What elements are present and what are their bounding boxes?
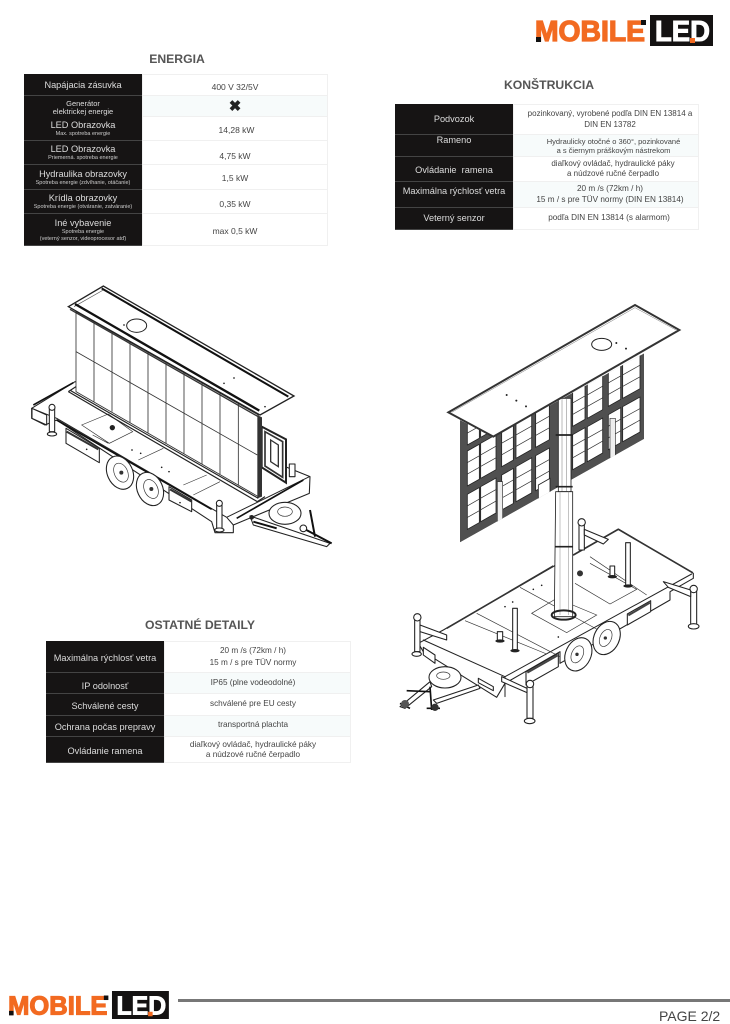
stabiliser legs xyxy=(412,519,699,724)
row: led obrazovka max: Max. spotreba energie xyxy=(56,131,110,137)
logo: top right: LED xyxy=(655,16,710,48)
table: ostatne detaily xyxy=(46,641,351,763)
row: maximalna rychlost vetra: 15 m / s pre TÜV normy xyxy=(210,658,296,667)
rear wing panel xyxy=(262,427,286,483)
led screen module grid xyxy=(460,353,644,542)
heading: energia: ENERGIA xyxy=(149,52,205,66)
row: veterny senzor: podľa DIN EN 13814 (s alarmom) xyxy=(548,213,670,222)
row: rameno: a s čiernym práškovým nástrekom xyxy=(557,146,670,155)
row: napajacia zasuvka: Napájacia zásuvka xyxy=(44,80,122,90)
row: maximalna rychlost vetra: 20 m /s (72km / h) xyxy=(577,184,643,193)
row: ine vybavenie: Spotreba energie xyxy=(62,229,104,235)
row: generator: Generátor xyxy=(66,98,100,108)
row: ip odolnost: IP65 (plne vodeodolné) xyxy=(211,678,295,687)
top panel xyxy=(68,286,294,417)
row: ovladanie ramena: diaľkový ovládač, hydraulické páky xyxy=(190,740,316,748)
logo: footer xyxy=(8,990,169,1020)
table: energia xyxy=(24,74,328,246)
row: ovladanie ramena xyxy=(395,157,699,182)
row: ine vybavenie: (veterný senzor, videoprocesor atď) xyxy=(40,236,126,242)
row: hydraulika: Spotreba energie (zdvíhanie, otáčanie) xyxy=(36,180,130,186)
screen face xyxy=(68,312,265,502)
row: ochrana pocas prepravy: Ochrana počas prepravy xyxy=(55,722,155,732)
row: ovladanie ramena: a núdzové ručné čerpadlo xyxy=(206,750,300,759)
row: generator xyxy=(24,96,328,117)
illustration: trailer with folded screen xyxy=(31,285,332,548)
row: hydraulika: Hydraulika obrazovky xyxy=(39,169,127,179)
row: maximalna rychlost vetra: 20 m /s (72km / h) xyxy=(220,646,286,655)
mast xyxy=(552,398,576,620)
row: schvalene cesty xyxy=(46,694,351,716)
logo: top right: MOBILE xyxy=(535,16,645,48)
row: led obrazovka priemer: Priemerná. spotreba energie xyxy=(48,155,118,161)
row: ine vybavenie xyxy=(24,214,328,246)
row: veterny senzor: Veterný senzor xyxy=(423,213,485,223)
row: veterny senzor xyxy=(395,208,699,230)
logo: top right xyxy=(535,15,713,48)
table: konstrukcia xyxy=(395,104,699,230)
row: led obrazovka max: 14,28 kW xyxy=(219,125,254,135)
row: maximalna rychlost vetra: Maximálna rýchlosť vetra xyxy=(54,653,156,663)
row: led obrazovka priemer xyxy=(24,141,328,165)
row: led obrazovka priemer: LED Obrazovka xyxy=(51,144,115,154)
row: podvozok: DIN EN 13782 xyxy=(584,120,636,128)
heading: konstrukcia: KONŠTRUKCIA xyxy=(504,78,594,92)
row: kridla: Krídla obrazovky xyxy=(49,193,117,203)
row: podvozok xyxy=(395,104,699,135)
row: napajacia zasuvka: 400 V 32/5V xyxy=(212,82,258,92)
row: rameno: Rameno xyxy=(437,135,471,145)
row: hydraulika: 1,5 kW xyxy=(222,173,248,183)
row: maximalna rychlost vetra xyxy=(395,182,699,208)
row: ip odolnost xyxy=(46,673,351,694)
row: ovladanie ramena: Ovládanie ramena xyxy=(67,746,143,756)
row: maximalna rychlost vetra xyxy=(46,641,351,673)
row: led obrazovka max: LED Obrazovka xyxy=(51,120,115,130)
logo: footer: MOBILE xyxy=(8,990,107,1020)
row: schvalene cesty: Schválené cesty xyxy=(72,701,138,711)
row: ine vybavenie: Iné vybavenie xyxy=(55,218,111,228)
row: hydraulika xyxy=(24,165,328,190)
row: napajacia zasuvka xyxy=(24,74,328,96)
tow bar and spare tire xyxy=(249,502,332,547)
top panel xyxy=(448,305,679,437)
row: kridla: 0,35 kW xyxy=(219,199,251,209)
trailer deck (zoom offset 615) xyxy=(418,529,693,697)
row: ovladanie ramena: diaľkový ovládač, hydraulické páky xyxy=(551,158,675,168)
small posts on deck xyxy=(513,608,517,650)
row: podvozok: Podvozok xyxy=(434,114,474,124)
row: maximalna rychlost vetra: Maximálna rýchlosť vetra xyxy=(403,186,505,196)
deck xyxy=(32,382,310,533)
row: maximalna rychlost vetra: 15 m / s pre TÜV normy (DIN EN 13814) xyxy=(536,194,684,204)
row: kridla xyxy=(24,190,328,214)
heading: ostatne detaily: OSTATNÉ DETAILY xyxy=(145,618,255,632)
wheels xyxy=(101,452,169,510)
illustration: trailer with raised screen xyxy=(400,304,700,724)
row: ine vybavenie: max 0,5 kW xyxy=(213,226,257,236)
wheels xyxy=(560,617,625,675)
row: generator: elektrickej energie xyxy=(53,106,113,116)
row: ochrana pocas prepravy: transportná plachta xyxy=(218,720,288,729)
row: podvozok: pozinkovaný, vyrobené podľa DIN EN 13814 a xyxy=(528,109,692,118)
row: ochrana pocas prepravy xyxy=(46,716,351,737)
row: ovladanie ramena xyxy=(46,737,351,763)
footer rule xyxy=(178,999,730,1002)
page number: PAGE 2/2 xyxy=(659,1008,720,1024)
row: ovladanie ramena: Ovládanie ramena xyxy=(415,165,493,175)
row: led obrazovka max xyxy=(24,117,328,141)
row: generator: ✖ xyxy=(229,98,241,115)
row: ip odolnost: IP odolnosť xyxy=(82,681,128,691)
row: ovladanie ramena: a núdzové ručné čerpadlo xyxy=(567,169,659,178)
row: kridla: Spotreba energie (otváranie, zatváranie) xyxy=(34,204,132,210)
stands xyxy=(32,404,295,532)
tow bar and spare tire xyxy=(400,667,480,711)
row: led obrazovka priemer: 4,75 kW xyxy=(219,151,251,161)
row: schvalene cesty: schválené pre EU cesty xyxy=(210,699,296,708)
row: rameno xyxy=(395,135,699,157)
row: rameno: Hydraulicky otočné o 360°, pozinkované xyxy=(547,136,680,146)
logo: footer: LED xyxy=(116,990,166,1020)
